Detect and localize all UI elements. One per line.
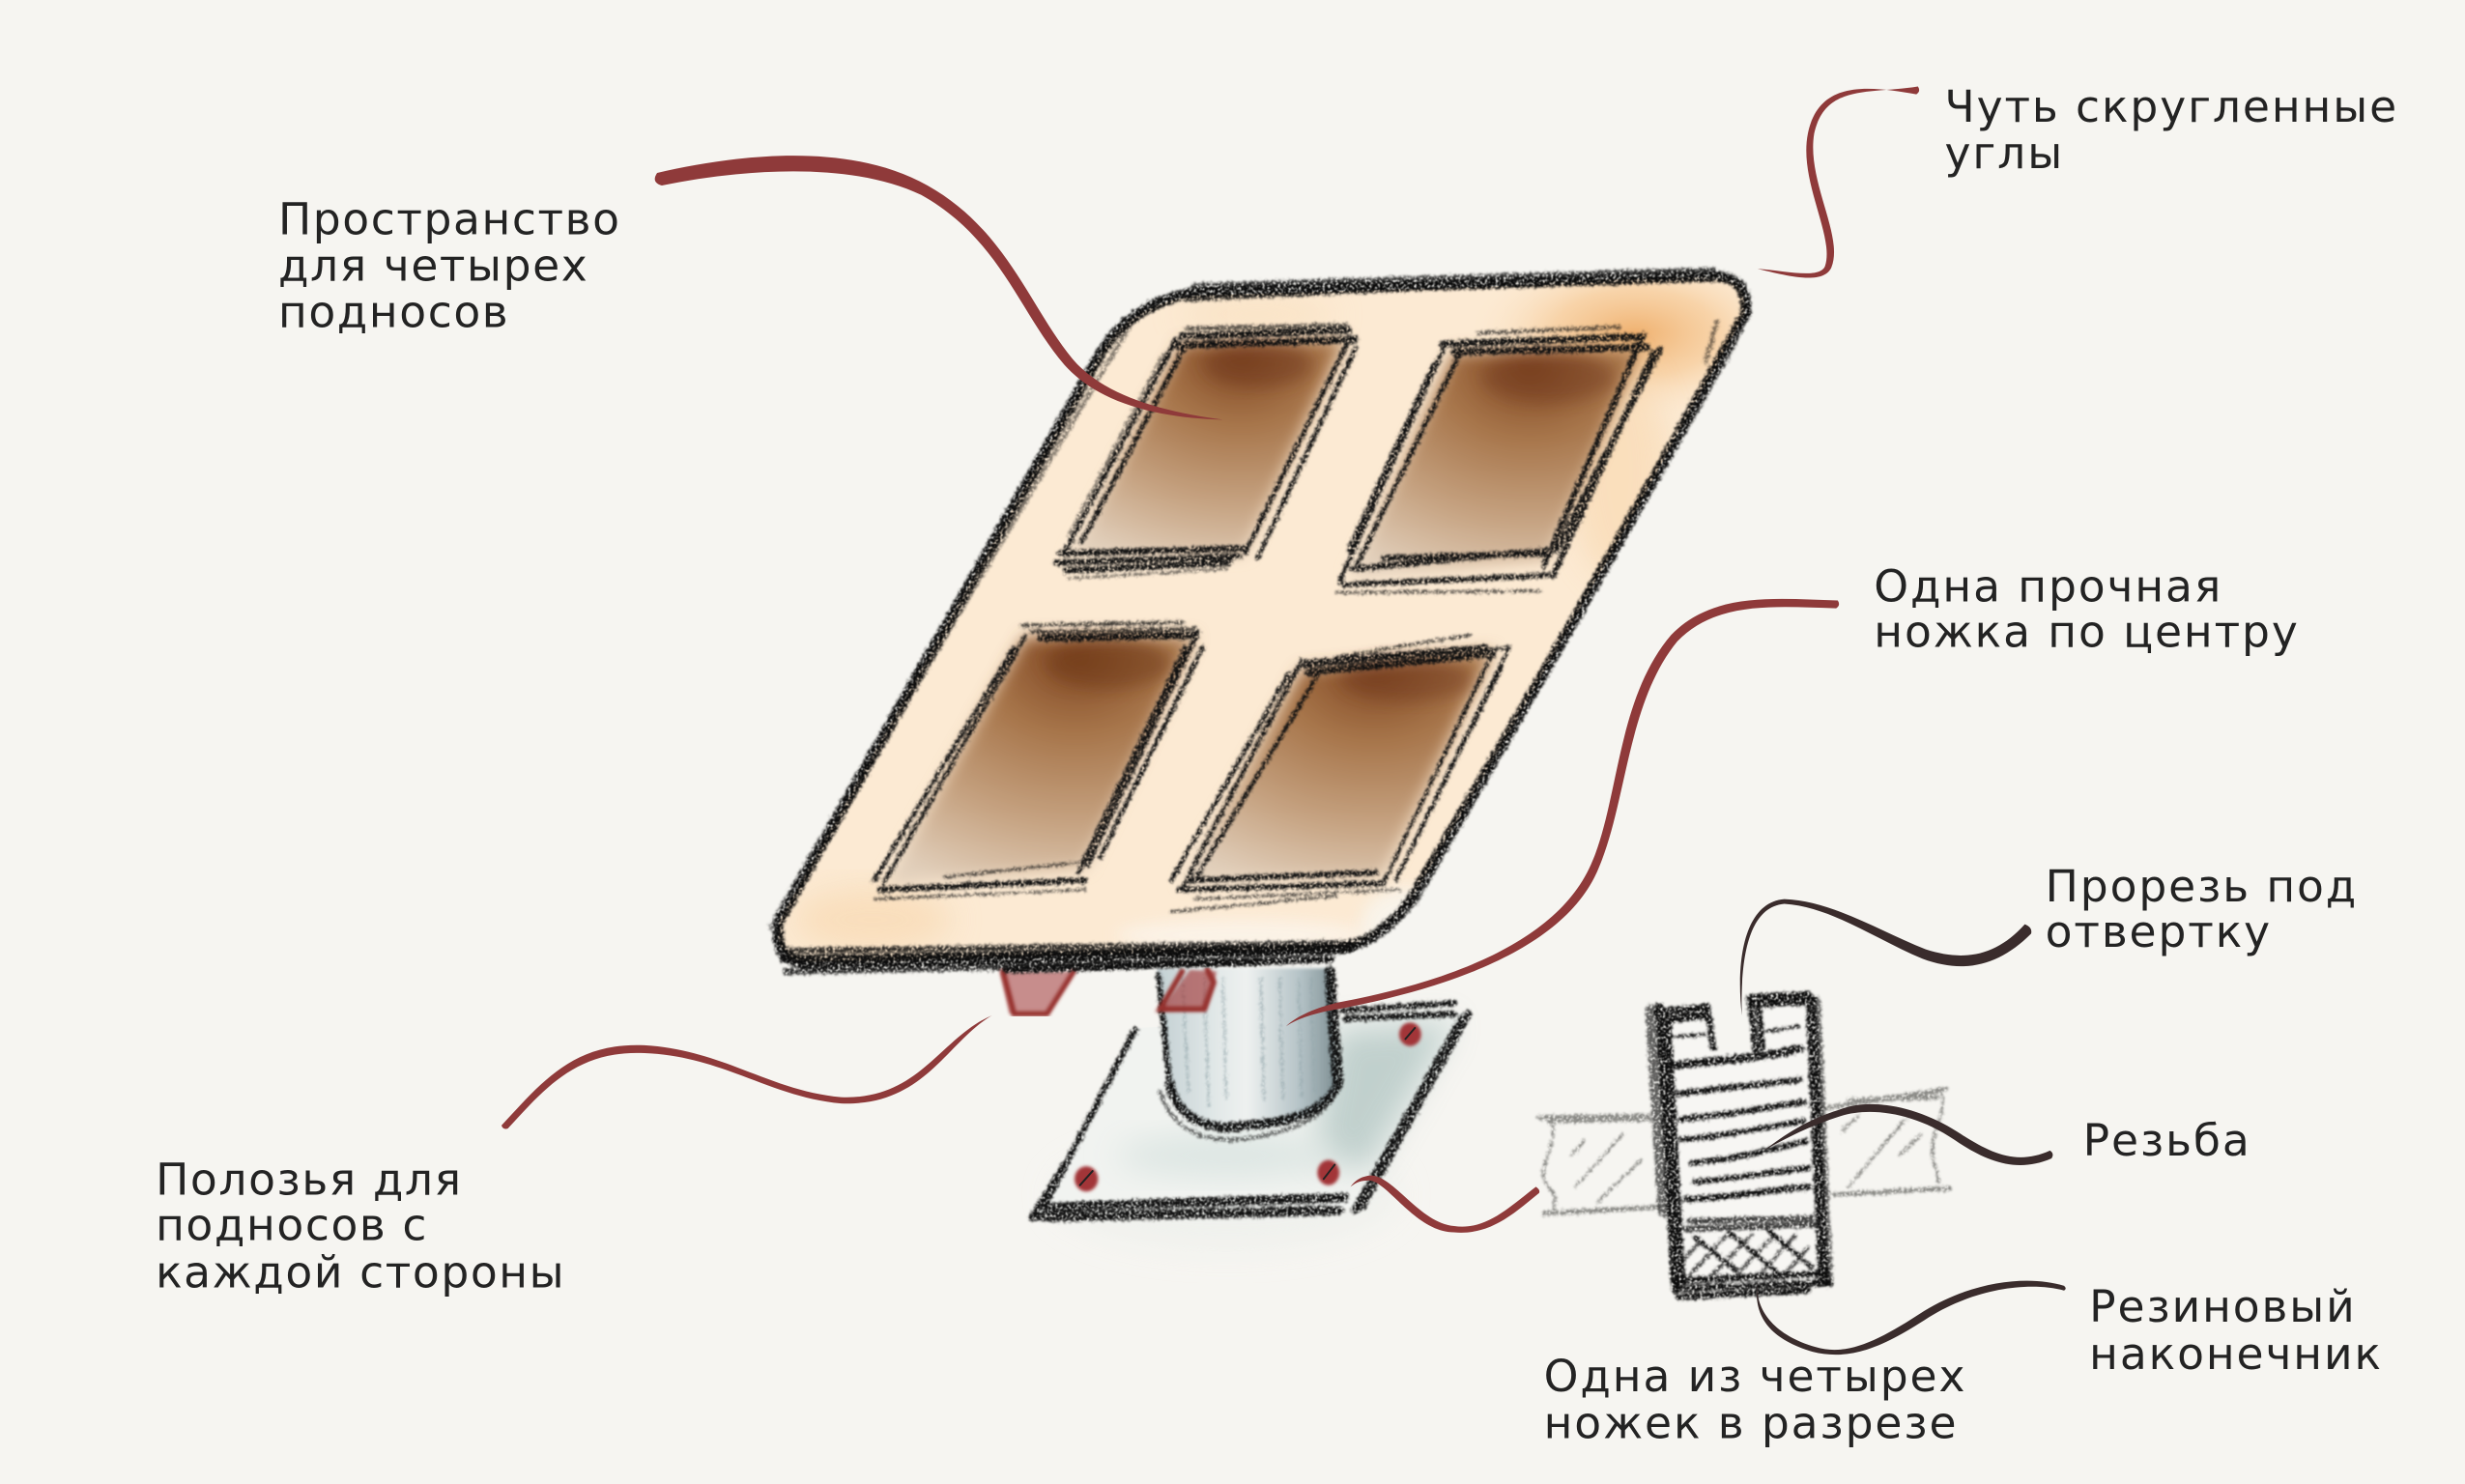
label: one strong central leg: ножка по центру: [1874, 606, 2300, 657]
callout line: tray rails: [502, 1015, 992, 1129]
label: one strong central leg: Одна прочная: [1874, 560, 2222, 612]
label: screwdriver slot: отвертку: [2046, 906, 2272, 957]
foot white body: [1660, 996, 1826, 1292]
callout line: central leg: [1286, 599, 1839, 1026]
label: one of four feet in section: Одна из четырех: [1544, 1351, 1966, 1402]
label: thread: Резьба: [2083, 1115, 2251, 1166]
panel fill: cream watercolor: [778, 246, 1800, 967]
illustration: base plate and support leg: [783, 948, 1469, 1249]
callout line: four feet: [1351, 1176, 1539, 1233]
panel bottom shadow strokes: [783, 948, 1352, 970]
label: rubber tip: Резиновый: [2089, 1281, 2357, 1332]
red tray rails under panel: [1000, 970, 1217, 1013]
label: tray rails on each side: подносов с: [156, 1200, 428, 1251]
label: one of four feet in section: ножек в разрезе: [1544, 1398, 1958, 1449]
support leg cylinder: [1157, 968, 1338, 1140]
foot walls and top: [1652, 995, 1830, 1289]
label: screwdriver slot: Прорезь под: [2046, 861, 2358, 912]
tray slot: top left: [1056, 326, 1355, 579]
callout line: space for four trays: [655, 156, 1223, 419]
callout line: rounded corners: [1758, 86, 1919, 277]
label: rubber tip: наконечник: [2089, 1328, 2383, 1380]
label: tray rails on each side: каждой стороны: [156, 1246, 565, 1298]
callout line: rubber tip: [1757, 1281, 2066, 1355]
callout line: screwdriver slot: [1740, 899, 2031, 1015]
label: space for four trays: Пространство: [278, 193, 621, 244]
foot screw slot: [1712, 990, 1755, 1053]
panel outline: rough black pencil with rounded corners: [770, 271, 1746, 971]
tray slot: bottom left: [874, 622, 1203, 899]
label: slightly rounded corners: углы: [1944, 128, 2064, 179]
rubber tip hatching: [1676, 1229, 1830, 1297]
tray slot: top right: [1336, 327, 1660, 592]
base plate outline: [1031, 1003, 1469, 1220]
label: space for four trays: подносов: [278, 286, 509, 337]
callout line: thread: [1763, 1104, 2052, 1165]
red screws: [1075, 1022, 1421, 1191]
base plate wash: [1038, 1013, 1469, 1249]
illustration: tray stand panel: [770, 246, 1800, 971]
label: space for four trays: для четырех: [278, 240, 588, 291]
tray slot: bottom right: [1171, 635, 1509, 912]
table section: [1539, 1089, 1949, 1213]
foot thread lines: [1671, 1048, 1814, 1229]
label: slightly rounded corners: Чуть скругленные: [1944, 81, 2398, 132]
label: tray rails on each side: Полозья для: [156, 1154, 463, 1205]
illustration: foot cross-section through the table: [1539, 990, 1949, 1297]
